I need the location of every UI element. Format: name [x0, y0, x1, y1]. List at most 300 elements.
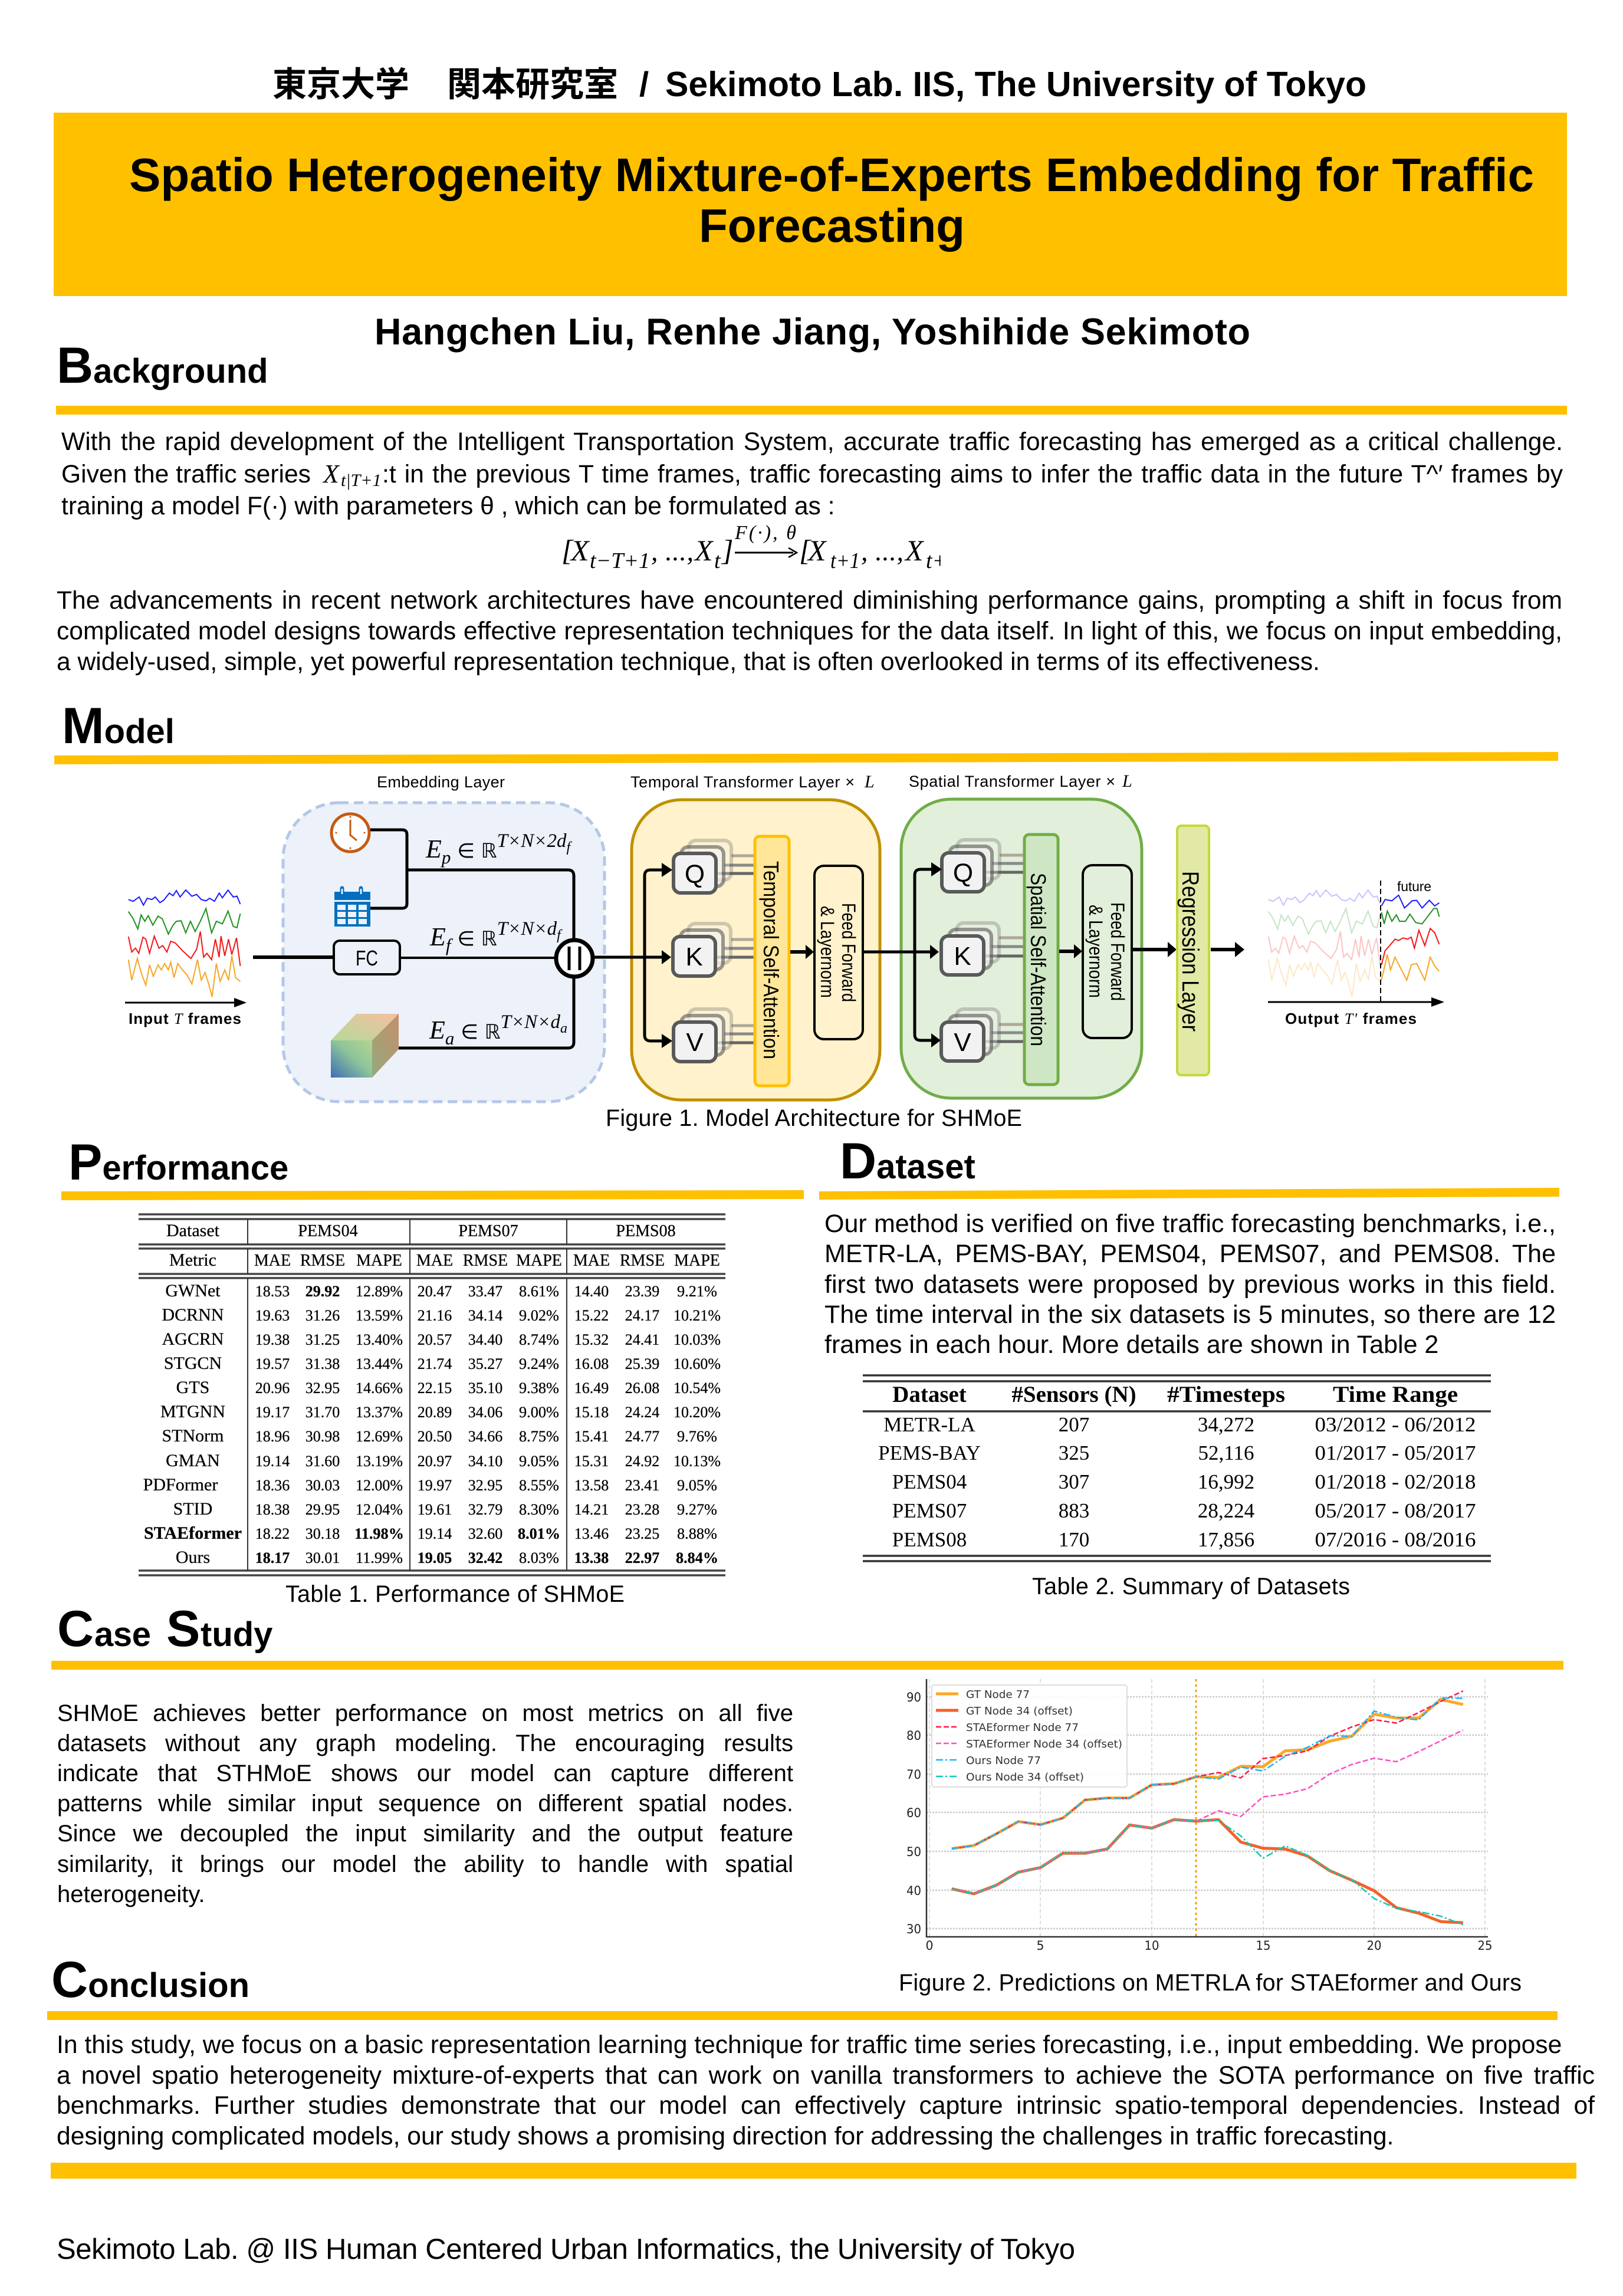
- table 1: performance: RMSE: [300, 1252, 345, 1270]
- table 1: performance: 24.92: [625, 1453, 659, 1470]
- table 1: performance: 15.18: [574, 1404, 609, 1421]
- table 2: datasets: 17,856: [1198, 1528, 1254, 1551]
- table 1: performance: 16.49: [574, 1379, 609, 1397]
- table 1: performance: 12.00%: [356, 1477, 403, 1494]
- table 1: performance: 14.40: [574, 1283, 609, 1300]
- header: lab name: [272, 65, 1366, 104]
- temporal stubs: [716, 856, 755, 1043]
- text: background paragraph: The advancements in recent network architectures have encountered diminishing performance gains, prompting a shift in focus from: [57, 586, 1562, 615]
- table 2: datasets: METR-LA: [883, 1413, 975, 1436]
- y tick labels: 40: [906, 1884, 921, 1898]
- table 1: performance: 20.89: [418, 1404, 452, 1421]
- table 1: performance: 14.66%: [356, 1379, 403, 1397]
- table 1: performance: 15.31: [574, 1453, 609, 1470]
- table 1: performance: MAPE: [674, 1252, 720, 1270]
- chart axes: [927, 1679, 1488, 1937]
- chart legend: GT Node 34 (offset): [966, 1705, 1073, 1717]
- temporal block: K: [673, 924, 731, 976]
- table 2: datasets: 207: [1059, 1413, 1089, 1436]
- table 1: performance: 11.99%: [356, 1549, 403, 1566]
- text: background paragraph: a widely-used, simple, yet powerful representation technique, that is often overlooked in terms of its effectiveness.: [57, 648, 1320, 676]
- formula: X: [694, 534, 714, 567]
- icon: clock: [331, 814, 369, 852]
- table 1: performance: STAEformer: [144, 1523, 242, 1543]
- heading: case study: tudy: [201, 1615, 272, 1654]
- table 1: performance: 21.74: [418, 1355, 452, 1372]
- table 1: performance: 19.14: [255, 1453, 290, 1470]
- table 1: performance: 32.95: [468, 1477, 502, 1494]
- table 1: performance: 20.57: [418, 1331, 452, 1348]
- box: FC: FC: [356, 946, 378, 970]
- heading: conclusion: [47, 1952, 1558, 2020]
- table 1: performance: 20.96: [255, 1379, 290, 1397]
- table 1: performance: 13.44%: [356, 1355, 403, 1372]
- table 1: performance: MAE: [254, 1252, 291, 1270]
- table 1: performance: GTS: [176, 1378, 209, 1397]
- table 1: performance: 22.15: [418, 1379, 452, 1397]
- y tick labels: [906, 1690, 921, 1936]
- table 2: datasets: 16,992: [1198, 1470, 1254, 1493]
- table 1: performance: 12.89%: [356, 1283, 403, 1300]
- table 1: performance: 14.21: [574, 1501, 609, 1518]
- x tick labels: 20: [1367, 1939, 1381, 1953]
- box: temporal feed forward: & Layernorm: [817, 906, 838, 998]
- table 1: performance: 9.24%: [519, 1355, 559, 1372]
- table 1: performance: PEMS07: [458, 1222, 518, 1240]
- heading: model: [54, 698, 1558, 764]
- table 1: performance: 34.14: [468, 1307, 502, 1324]
- table 1: performance: 10.13%: [673, 1453, 721, 1470]
- text: conclusion paragraph: [57, 2031, 1595, 2150]
- formula: t+1: [830, 548, 860, 573]
- table 2: datasets: 05/2017 - 08/2017: [1315, 1499, 1476, 1522]
- table 2: datasets: 28,224: [1198, 1499, 1254, 1522]
- y tick labels: 70: [906, 1768, 921, 1782]
- formula: Ef: f: [557, 928, 563, 943]
- spatial stubs: [984, 855, 1023, 1042]
- table 2: datasets: 01/2018 - 02/2018: [1315, 1470, 1476, 1493]
- caption: table 1: Table 1. Performance of SHMoE: [285, 1581, 625, 1607]
- heading: case study: S: [166, 1601, 200, 1657]
- table 2: datasets: 03/2012 - 06/2012: [1315, 1413, 1476, 1436]
- icon: spatial cube: [331, 1014, 399, 1078]
- table 1: performance: 31.38: [305, 1355, 340, 1372]
- arrows: into temporal Q K V: [594, 863, 672, 1048]
- formula: t: [714, 548, 721, 573]
- table 1: performance: 9.02%: [519, 1307, 559, 1324]
- table 1: performance: 10.20%: [673, 1404, 721, 1421]
- box: spatial feed forward: & Layernorm: [1085, 905, 1106, 998]
- heading: performance: [61, 1134, 804, 1200]
- table 1: performance: 19.05: [418, 1549, 452, 1566]
- table 1: performance: 13.37%: [356, 1404, 403, 1421]
- text: case study paragraph: SHMoE achieves better performance on most metrics on all five: [57, 1700, 793, 1726]
- heading: case study: C: [57, 1601, 94, 1657]
- table 1: performance: 30.01: [305, 1549, 340, 1566]
- text: dataset paragraph: first two datasets were proposed by previous works in this field.: [824, 1270, 1556, 1299]
- bar: temporal self-attention: Temporal Self-Attention: [759, 861, 783, 1059]
- table 1: performance: 30.18: [305, 1525, 340, 1542]
- table 1: performance: MAPE: [356, 1252, 402, 1270]
- text: dataset paragraph: METR-LA, PEMS-BAY, PEMS04, PEMS07, and PEMS08. The: [824, 1240, 1556, 1268]
- table 1: performance: 8.74%: [519, 1331, 559, 1348]
- table 1: performance: 31.25: [305, 1331, 340, 1348]
- heading: dataset: [819, 1133, 1559, 1200]
- table 1: performance: 10.54%: [673, 1379, 721, 1397]
- table 1: performance: MAE: [573, 1252, 610, 1270]
- table 1: performance: 8.01%: [518, 1525, 560, 1542]
- table 1: performance: 13.19%: [356, 1453, 403, 1470]
- formula: X: [570, 534, 590, 567]
- table 1: performance: 9.05%: [677, 1477, 717, 1494]
- x tick labels: 25: [1478, 1939, 1492, 1953]
- label: spatial transformer layer: L: [1122, 771, 1132, 791]
- table 1: performance: 33.47: [468, 1283, 502, 1300]
- table 1: performance: 18.22: [255, 1525, 290, 1542]
- bottom bar: [51, 2163, 1576, 2179]
- label: future: future: [1397, 879, 1431, 894]
- bar: temporal self-attention: [755, 836, 789, 1086]
- table 1: performance: 12.04%: [356, 1501, 403, 1518]
- table 2: datasets: PEMS07: [892, 1499, 967, 1522]
- formula: X: [904, 534, 925, 567]
- table 1: performance: RMSE: [463, 1252, 508, 1270]
- text: case study paragraph: patterns while similar input sequence on different spatial nodes.: [57, 1791, 793, 1817]
- table 1: performance: 13.59%: [356, 1307, 403, 1324]
- label: input frames: Input T frames: [129, 1010, 241, 1027]
- spatial block: V: [941, 1009, 999, 1061]
- table 1: performance: 23.25: [625, 1525, 659, 1542]
- text: case study paragraph: datasets without any graph modeling. The encouraging results: [57, 1730, 793, 1756]
- table 2: datasets: 307: [1059, 1470, 1089, 1493]
- heading: background: [56, 337, 1567, 415]
- formula: Ep: ∈ ℝ: [451, 839, 497, 863]
- table 1: performance: 18.53: [255, 1283, 290, 1300]
- temporal block: V: V: [686, 1028, 704, 1057]
- panel: temporal transformer: [632, 800, 880, 1100]
- y tick labels: 50: [906, 1845, 921, 1859]
- table 1: performance: STNorm: [162, 1426, 224, 1446]
- table 1: performance: 31.26: [305, 1307, 340, 1324]
- y tick labels: 80: [906, 1729, 921, 1743]
- x tick labels: 10: [1144, 1939, 1159, 1953]
- input axis arrow: [125, 998, 247, 1007]
- spatial block: V: V: [954, 1028, 971, 1057]
- header: lab name: 東京大学: [272, 65, 409, 104]
- text: conclusion paragraph: a novel spatio heterogeneity mixture-of-experts that can work on vanilla transformers to achieve the SOTA performance on five traffic: [57, 2061, 1595, 2089]
- table 1: performance: 19.38: [255, 1331, 290, 1348]
- chart series: [952, 1691, 1463, 1924]
- table 2: datasets: 34,272: [1198, 1413, 1254, 1436]
- table 1: performance: 34.66: [468, 1428, 502, 1445]
- label: temporal transformer layer: L: [864, 772, 875, 791]
- text: background intro with inline math: training a model F(·) with parameters θ , which can be formulated as :: [61, 492, 835, 520]
- table 1: performance: 30.03: [305, 1477, 340, 1494]
- embedding connectors: [370, 830, 574, 1048]
- heading: dataset: Dataset: [840, 1133, 975, 1190]
- table 1: performance: 32.95: [305, 1379, 340, 1397]
- table 1: performance: 35.10: [468, 1379, 502, 1397]
- formula: Ea: a: [445, 1028, 454, 1049]
- formula: Ef: ∈ ℝ: [451, 927, 497, 951]
- arrow: feed forward to regression: [1132, 942, 1177, 957]
- table 1: performance: 23.39: [625, 1283, 659, 1300]
- text: case study paragraph: heterogeneity.: [57, 1881, 205, 1907]
- table 1: performance: 31.60: [305, 1453, 340, 1470]
- arrow: regression to output: [1211, 942, 1244, 957]
- chart legend: Ours Node 77: [966, 1755, 1041, 1767]
- table 1: performance: MAPE: [516, 1252, 562, 1270]
- table 1: performance: 23.41: [625, 1477, 659, 1494]
- text: background paragraph: [57, 586, 1562, 676]
- table 1: performance: Metric: [169, 1250, 216, 1270]
- text: dataset paragraph: Our method is verified on five traffic forecasting benchmarks, i.e.,: [824, 1210, 1556, 1238]
- table 1: performance: 8.88%: [677, 1525, 717, 1542]
- chart legend: [932, 1685, 1127, 1787]
- table 2: datasets: 01/2017 - 05/2017: [1315, 1441, 1476, 1464]
- caption: figure 2: Figure 2. Predictions on METRLA for STAEformer and Ours: [899, 1970, 1522, 1996]
- text: background intro with inline math: :t in the previous T time frames, traffic forecasting aims to infer the traffic data in the future T^′ frames by: [382, 460, 1563, 488]
- table 2: datasets: PEMS-BAY: [878, 1441, 981, 1464]
- table 2: datasets: PEMS08: [892, 1528, 967, 1551]
- x tick labels: 0: [926, 1939, 933, 1953]
- input series: [129, 890, 240, 997]
- authors: Hangchen Liu, Renhe Jiang, Yoshihide Sekimoto: [374, 311, 1250, 353]
- table 1: performance: MTGNN: [160, 1402, 225, 1421]
- header: lab name: Sekimoto Lab. IIS, The University of Tokyo: [665, 65, 1366, 104]
- text: background intro with inline math: Given the traffic series: [61, 460, 311, 488]
- table 1: performance: MAE: [416, 1252, 453, 1270]
- formula: F(·), θ: [734, 522, 796, 544]
- table 1: performance: AGCRN: [162, 1329, 224, 1349]
- formula: [: [799, 534, 812, 567]
- spatial block: Q: Q: [953, 859, 973, 888]
- table 1: performance: 19.97: [418, 1477, 452, 1494]
- bar: spatial self-attention: [1024, 835, 1058, 1085]
- title banner: Forecasting: [699, 199, 965, 252]
- table 1: performance: STID: [173, 1499, 212, 1519]
- temporal block: K: K: [685, 942, 703, 971]
- table 1: performance: STGCN: [164, 1354, 222, 1373]
- table 1: performance: RMSE: [620, 1252, 665, 1270]
- formula: Ef: f: [446, 935, 454, 955]
- table 1: performance: 16.08: [574, 1355, 609, 1372]
- output axis: [1268, 881, 1444, 1007]
- table 1: performance: 24.41: [625, 1331, 659, 1348]
- formula: Ea: T×N×d: [501, 1011, 560, 1033]
- table 2: datasets: 07/2016 - 08/2016: [1315, 1528, 1476, 1551]
- table 1: performance: 18.38: [255, 1501, 290, 1518]
- formula: t+1: [926, 548, 958, 573]
- label: output frames: Output T′ frames: [1285, 1010, 1417, 1027]
- table 1: performance: 9.05%: [519, 1453, 559, 1470]
- table 1: performance: 13.58: [574, 1477, 609, 1494]
- output series: [1269, 890, 1439, 997]
- heading: background: Background: [57, 337, 268, 394]
- table 1: performance: [139, 1214, 725, 1575]
- table 1: performance: 32.42: [468, 1549, 502, 1566]
- table 1: performance: 35.27: [468, 1355, 502, 1372]
- text: dataset paragraph: The time interval in the six datasets is 5 minutes, so there are 12: [824, 1300, 1556, 1329]
- caption: figure 1: Figure 1. Model Architecture for SHMoE: [606, 1105, 1022, 1131]
- table 2: datasets: 325: [1059, 1441, 1089, 1464]
- table 1: performance: 8.61%: [519, 1283, 559, 1300]
- table 1: performance: PEMS04: [298, 1222, 358, 1240]
- table 1: performance: Dataset: [166, 1221, 220, 1240]
- table 2: datasets: #Sensors (N): [1011, 1382, 1136, 1407]
- table 1: performance: 9.21%: [677, 1283, 717, 1300]
- chart legend: Ours Node 34 (offset): [966, 1771, 1084, 1783]
- table 1: performance: 26.08: [625, 1379, 659, 1397]
- table 1: performance: 31.70: [305, 1404, 340, 1421]
- table 1: performance: 24.17: [625, 1307, 659, 1324]
- table 1: performance: 8.84%: [676, 1549, 718, 1566]
- formula: Ep: T×N×2d: [497, 830, 567, 852]
- table 2: datasets: #Timesteps: [1167, 1382, 1285, 1407]
- table 1: performance: PEMS08: [616, 1222, 676, 1240]
- table 2: datasets: [863, 1375, 1491, 1561]
- chart grid: [927, 1679, 1488, 1936]
- table 1: performance: 19.61: [418, 1501, 452, 1518]
- table 1: performance: DCRNN: [162, 1305, 224, 1325]
- chart legend: STAEformer Node 77: [966, 1722, 1079, 1734]
- table 2: datasets: Dataset: [892, 1382, 967, 1407]
- table 1: performance: Ours: [176, 1548, 210, 1567]
- formula: X: [807, 534, 827, 567]
- formula: Ep: p: [441, 847, 451, 868]
- formula: Ea: ∈ ℝ: [454, 1020, 501, 1044]
- formula: Ep: f: [566, 840, 572, 855]
- table 2: datasets: Time Range: [1333, 1382, 1458, 1407]
- table 1: performance: 34.40: [468, 1331, 502, 1348]
- title banner: Spatio Heterogeneity Mixture-of-Experts Embedding for Traffic: [129, 149, 1534, 201]
- formula: Ef: T×N×d: [497, 918, 557, 940]
- box: FC: [334, 941, 400, 974]
- table 1: performance: 9.00%: [519, 1404, 559, 1421]
- table 1: performance: GWNet: [165, 1281, 221, 1300]
- table 1: performance: 8.30%: [519, 1501, 559, 1518]
- table 1: performance: 15.32: [574, 1331, 609, 1348]
- table 1: performance: 8.03%: [519, 1549, 559, 1566]
- table 1: performance: 20.47: [418, 1283, 452, 1300]
- table 1: performance: 32.79: [468, 1501, 502, 1518]
- line chart: predictions: [906, 1679, 1492, 1953]
- heading: case study: ase: [94, 1615, 151, 1654]
- formula: Ep: E: [426, 835, 442, 863]
- table 1: performance: 20.50: [418, 1428, 452, 1445]
- table 1: performance: 8.75%: [519, 1428, 559, 1445]
- table 1: performance: 12.69%: [356, 1428, 403, 1445]
- concat symbol: [556, 940, 593, 977]
- table 1: performance: 10.03%: [673, 1331, 721, 1348]
- formula: Ep: [425, 830, 572, 868]
- label: temporal transformer layer: Temporal Transformer Layer ×: [630, 773, 855, 791]
- table 1: performance: 13.46: [574, 1525, 609, 1542]
- table 1: performance: 13.40%: [356, 1331, 403, 1348]
- y tick labels: 90: [906, 1690, 921, 1704]
- bar: regression layer: [1177, 826, 1209, 1075]
- heading: performance: Performance: [68, 1134, 288, 1191]
- heading: conclusion: Conclusion: [51, 1952, 249, 2008]
- table 1: performance: 9.76%: [677, 1428, 717, 1445]
- formula: [563, 525, 941, 569]
- table 2: datasets: 883: [1059, 1499, 1089, 1522]
- text: background paragraph: complicated model designs towards effective representation techniques for the data itself. In light of this, we focus on input embedding,: [57, 617, 1562, 645]
- table 1: performance: 18.96: [255, 1428, 290, 1445]
- table 1: performance: 29.95: [305, 1501, 340, 1518]
- table 1: performance: 19.17: [255, 1404, 290, 1421]
- table 1: performance: 15.22: [574, 1307, 609, 1324]
- formula: [: [561, 534, 574, 567]
- x tick labels: [926, 1939, 1492, 1953]
- formula: , ...,: [651, 536, 694, 566]
- table 1: performance: GMAN: [166, 1451, 220, 1470]
- arrow: input to FC: [253, 955, 334, 959]
- bar: spatial self-attention: Spatial Self-Attention: [1026, 873, 1050, 1046]
- heading: model: Model: [62, 698, 175, 754]
- table 1: performance: 15.41: [574, 1428, 609, 1445]
- text: dataset paragraph: [824, 1210, 1556, 1359]
- table 1: performance: 9.38%: [519, 1379, 559, 1397]
- text: background intro with inline math: With the rapid development of the Intelligent Transportation System, accurate traffic forecasting has emerged as a critical challenge.: [61, 428, 1563, 456]
- table 1: performance: 10.60%: [673, 1355, 721, 1372]
- arrows: into spatial Q K V: [864, 862, 942, 1047]
- table 1: performance: 18.17: [255, 1549, 290, 1566]
- formula: Ef: [429, 918, 563, 955]
- icon: calendar: [334, 888, 370, 927]
- box: temporal feed forward: [814, 866, 863, 1039]
- caption: table 2: Table 2. Summary of Datasets: [1032, 1574, 1350, 1599]
- table 1: performance: 19.57: [255, 1355, 290, 1372]
- heading: case study: [51, 1601, 1563, 1670]
- table 1: performance: PDFormer: [143, 1475, 218, 1494]
- arrow: spatial attention to feed forward: [1059, 944, 1082, 958]
- table 1: performance: 18.36: [255, 1477, 290, 1494]
- title banner: [54, 113, 1567, 296]
- x tick labels: 15: [1256, 1939, 1270, 1953]
- table 2: datasets: PEMS04: [892, 1470, 967, 1493]
- model architecture diagram: [125, 771, 1444, 1102]
- formula: Ea: E: [429, 1016, 445, 1044]
- table 1: performance: 13.38: [574, 1549, 609, 1566]
- formula: Ea: [429, 1011, 567, 1049]
- y tick labels: 30: [906, 1922, 921, 1936]
- table 1: performance: 29.92: [305, 1283, 340, 1300]
- text: conclusion paragraph: designing complicated models, our study shows a promising direction for addressing the challenges in traffic forecasting.: [57, 2122, 1394, 2150]
- text: case study paragraph: similarity, it brings our model the ability to handle with spatial: [57, 1851, 793, 1877]
- arrow: attention to feed forward: [790, 945, 814, 959]
- box: spatial feed forward: Feed Forward: [1107, 902, 1128, 1001]
- temporal block: V: [673, 1009, 731, 1062]
- formula: Ea: a: [560, 1021, 567, 1036]
- label: spatial transformer layer: Spatial Transformer Layer ×: [909, 773, 1115, 790]
- table 1: performance: 23.28: [625, 1501, 659, 1518]
- text: conclusion paragraph: benchmarks. Further studies demonstrate that our model can effectively capture intrinsic spatio-temporal dependencies. Instead of: [57, 2091, 1595, 2120]
- text: background intro with inline math: [61, 428, 1563, 520]
- spatial block: K: K: [954, 942, 971, 971]
- table 2: datasets: 52,116: [1198, 1441, 1254, 1464]
- footer: Sekimoto Lab. @ IIS Human Centered Urban Informatics, the University of Tokyo: [57, 2233, 1075, 2265]
- chart legend: STAEformer Node 34 (offset): [966, 1738, 1122, 1750]
- table 1: performance: 21.16: [418, 1307, 452, 1324]
- x tick labels: 5: [1037, 1939, 1044, 1953]
- header: lab name: 関本研究室: [447, 65, 618, 104]
- y tick labels: 60: [906, 1806, 921, 1820]
- text: case study paragraph: Since we decoupled the input similarity and the output feature: [57, 1821, 793, 1847]
- table 1: performance: 20.97: [418, 1453, 452, 1470]
- table 1: performance: 25.39: [625, 1355, 659, 1372]
- table 2: datasets: 170: [1059, 1528, 1089, 1551]
